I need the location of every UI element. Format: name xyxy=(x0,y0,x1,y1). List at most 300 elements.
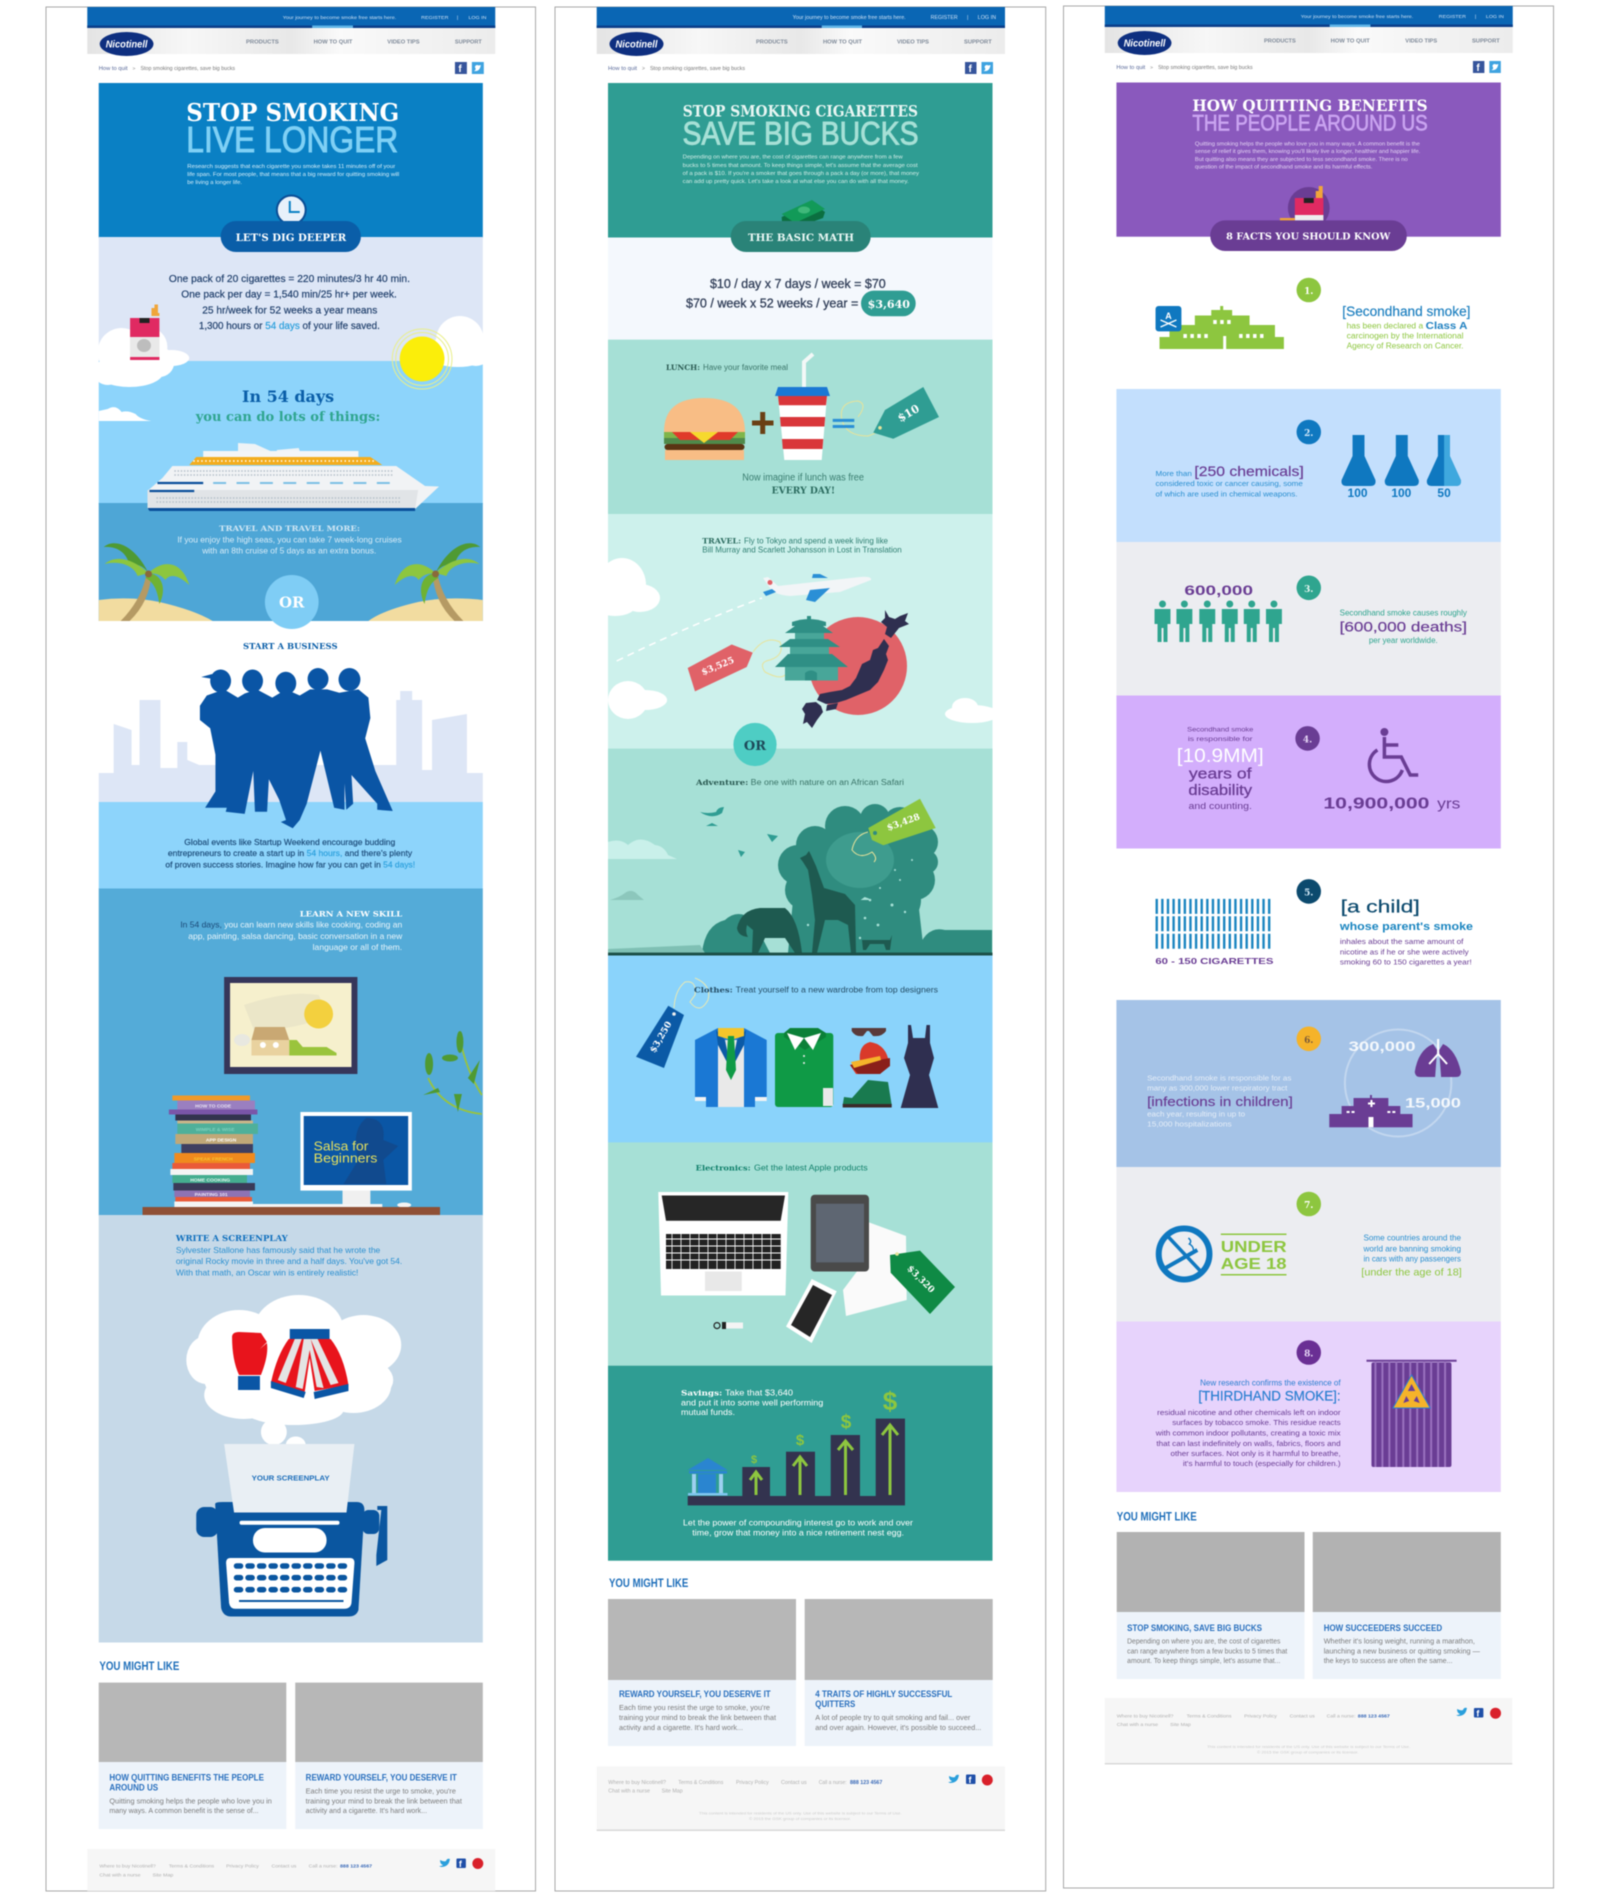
text: 10.9MM years xyxy=(1177,726,1264,811)
illustration: map of japan xyxy=(802,610,909,728)
footer: Contact us xyxy=(271,1864,297,1870)
price tag: $10: $10 xyxy=(895,402,922,425)
text: 600,000 deaths: [600,000 deaths] xyxy=(1340,618,1467,635)
price tag: $10 xyxy=(873,387,939,439)
text: pack arithmetic xyxy=(169,274,410,332)
section: write a screenplay: original Rocky movie in three and a half days. You've got 54. xyxy=(176,1257,402,1266)
chart: growing savings bars xyxy=(688,1386,905,1505)
card: stop smoking save big bucks: Depending on where you are, the cost of cigarettes xyxy=(1127,1636,1281,1645)
icon: clock xyxy=(277,196,306,224)
illustration: cruise ship xyxy=(147,443,439,511)
text: a child: whose parent's smoke xyxy=(1339,921,1473,933)
icon: plus xyxy=(752,412,774,434)
text: 10.9MM years: is responsible for xyxy=(1188,736,1253,743)
icon: cigarette pack on circle xyxy=(1280,186,1330,229)
heading: you might like: YOU MIGHT LIKE xyxy=(99,1661,180,1673)
price tag: $3,525: $3,525 xyxy=(700,656,736,678)
card: how quitting benefits: many ways. A common benefit is the sense of... xyxy=(109,1806,259,1815)
breadcrumb and share icons: How to quit xyxy=(1116,65,1146,71)
hero banner: LIVE LONGER xyxy=(186,119,398,160)
hero banner: SAVE BIG BUCKS xyxy=(682,116,918,152)
fact 3: 600,000 xyxy=(1184,582,1253,598)
icon: laptop xyxy=(658,1192,788,1296)
pale math section background xyxy=(99,237,483,362)
breadcrumb and share icons: f xyxy=(968,64,972,75)
flask labels: 100 xyxy=(1391,486,1412,500)
illustration: monitor with salsa video xyxy=(253,1112,412,1208)
site header: | xyxy=(1475,14,1476,20)
footer: Privacy Policy xyxy=(226,1864,259,1870)
pill: the basic math xyxy=(731,221,871,252)
text: 250 chemicals: considered toxic or cancer causing, some xyxy=(1156,479,1303,488)
card: reward yourself: REWARD YOURSELF, YOU DESERVE IT xyxy=(306,1773,457,1783)
site header: Your journey to become smoke free starts here. xyxy=(283,15,396,21)
card: reward yourself: training your mind to break the link between that xyxy=(619,1713,777,1722)
section: lunch: LUNCH: xyxy=(666,363,700,372)
section: learn a new skill: app, painting, salsa dancing, basic conversation in a new xyxy=(188,932,402,941)
fact 1: 1. xyxy=(1304,287,1313,297)
text: lunch free every day: Now imagine if lunch was free xyxy=(742,472,864,484)
text: 250 chemicals: of which are used in chemical weapons. xyxy=(1156,489,1298,499)
illustration: red sun xyxy=(809,617,907,715)
flask labels: 50 xyxy=(1437,486,1451,500)
icon: equals xyxy=(833,420,854,426)
card: reward yourself: Each time you resist the urge to smoke, you're xyxy=(619,1703,770,1712)
text: pack arithmetic: One pack per day = 1,540 min/25 hr+ per week. xyxy=(181,289,397,301)
fact 5: 5. xyxy=(1304,888,1313,898)
breadcrumb and share icons: > xyxy=(1150,65,1153,71)
card: reward yourself xyxy=(608,1599,796,1746)
footer: Where to buy Nicotinell? xyxy=(1117,1713,1174,1720)
text: thirdhand smoke: that can last indefinitely on walls, fabrics, floors and xyxy=(1156,1439,1341,1448)
text: 250 chemicals: [250 chemicals] xyxy=(1194,464,1304,479)
section: clothes: Clothes: xyxy=(694,986,733,994)
footer: Terms & Conditions xyxy=(1187,1713,1232,1720)
breadcrumb and share icons xyxy=(99,62,484,75)
text: travel and travel more: If you enjoy the high seas, you can take 7 week-long cruises xyxy=(177,535,402,545)
fact 3 xyxy=(1116,542,1501,696)
hero banner: can add up pretty quick. Let's take a look at what else you can do with all that money. xyxy=(683,179,909,185)
section: savings xyxy=(608,1366,992,1561)
card: stop smoking save big bucks: STOP SMOKING, SAVE BIG BUCKS xyxy=(1127,1623,1262,1633)
text: travel and travel more xyxy=(177,524,402,556)
fact 2 xyxy=(1116,389,1501,542)
text: 600,000 deaths: Secondhand smoke causes roughly xyxy=(1340,608,1467,618)
footer: 888 123 4567 xyxy=(1358,1713,1390,1720)
icon: soda cup xyxy=(775,354,830,460)
label: 300,000: 300,000 xyxy=(1349,1038,1416,1054)
footer: Chat with a nurse xyxy=(1117,1722,1158,1728)
site header: SUPPORT xyxy=(964,40,993,46)
breadcrumb and share icons: f xyxy=(458,64,462,75)
card: how succeeders succeed: HOW SUCCEEDERS SUCCEED xyxy=(1324,1623,1443,1633)
illustration: right palm xyxy=(395,543,480,621)
pill: 8 facts xyxy=(1210,220,1407,251)
section: learn a new skill: In 54 days, you can learn new skills like cooking, coding an xyxy=(180,920,402,930)
footer: Site Map xyxy=(662,1788,683,1794)
text: infections in children xyxy=(1147,1073,1293,1129)
text: secondhand smoke: [Secondhand smoke] xyxy=(1342,303,1470,319)
footer: f xyxy=(459,1859,462,1869)
breadcrumb and share icons: How to quit xyxy=(608,66,638,72)
section: electronics: Get the latest Apple products xyxy=(754,1164,868,1172)
heading: in 54 days: you can do lots of things: xyxy=(195,410,380,425)
text: 10.9MM years: years of xyxy=(1189,765,1253,783)
illustration: leaves xyxy=(423,1031,482,1114)
fact 8: 8. xyxy=(1304,1349,1313,1360)
site header: PRODUCTS xyxy=(756,40,788,46)
text: startup weekend: entrepreneurs to create a start up in 54 hours, and there's plenty xyxy=(168,849,413,858)
section: learn a new skill xyxy=(99,888,483,1216)
chart: growing savings bars: $ xyxy=(883,1386,898,1416)
site header: VIDEO TIPS xyxy=(387,39,420,46)
footer xyxy=(87,1849,495,1891)
illustration: stack of books: APP DESIGN xyxy=(206,1137,237,1144)
section: travel: TRAVEL: xyxy=(702,536,741,546)
hero banner: THE PEOPLE AROUND US xyxy=(1192,110,1428,136)
chart: growing savings bars: $ xyxy=(841,1412,852,1433)
hero banner: life span. For most people, that means that a big reward for quitting smoking will xyxy=(187,172,399,178)
text: travel and travel more: with an 8th cruise of 5 days as an extra bonus. xyxy=(201,546,376,556)
site header: REGISTER xyxy=(931,15,958,21)
site header: LOG IN xyxy=(1486,14,1504,20)
illustration: stack of books: HOW TO CODE xyxy=(195,1103,232,1110)
hero banner xyxy=(608,83,992,238)
footer: Terms & Conditions xyxy=(678,1780,724,1786)
hero banner: sense of relief it gives them, knowing you'll likely live a longer, healthier and happier life. xyxy=(1195,149,1421,155)
icon: cigarette pack xyxy=(130,304,159,360)
footer: Contact us xyxy=(781,1780,807,1786)
illustration: typewriter: YOUR SCREENPLAY xyxy=(252,1475,330,1483)
badge: or xyxy=(608,723,992,956)
section: lunch xyxy=(608,340,992,514)
icon: dress xyxy=(901,1025,938,1108)
text: banning smoking: in cars with any passengers xyxy=(1363,1254,1461,1264)
icon: wheelchair xyxy=(1369,728,1418,781)
pill: let's dig deeper: LET'S DIG DEEPER xyxy=(236,233,347,244)
text: adventure: Adventure: xyxy=(695,778,749,787)
text: 10,900,000 yrs: yrs xyxy=(1437,795,1460,813)
fact 1 xyxy=(1156,278,1470,351)
pill: 8 facts: 8 FACTS YOU SHOULD KNOW xyxy=(1226,231,1391,243)
hero banner: be living a longer life. xyxy=(187,180,242,186)
price tag: $3,250 xyxy=(636,1006,684,1068)
price tag: $3,320: $3,320 xyxy=(905,1264,936,1295)
site header: HOW TO QUIT xyxy=(823,40,863,46)
footer: © 2015 the GSK group of companies or its licensor. xyxy=(1257,1750,1359,1755)
footer: f xyxy=(968,1775,972,1785)
footer: Privacy Policy xyxy=(736,1780,769,1786)
illustration: stack of books xyxy=(169,1096,258,1207)
icon: green shirt xyxy=(775,1028,833,1107)
site header: PRODUCTS xyxy=(1264,38,1296,45)
site header: REGISTER xyxy=(1439,14,1466,20)
text: 250 chemicals: More than xyxy=(1156,469,1192,478)
site header: | xyxy=(457,15,458,21)
card: 4 traits: 4 TRAITS OF HIGHLY SUCCESSFUL xyxy=(815,1689,953,1699)
text: 600,000 deaths: per year worldwide. xyxy=(1369,636,1438,645)
icon: tablet xyxy=(811,1195,869,1272)
price tag string xyxy=(841,401,878,436)
breadcrumb and share icons: Stop smoking cigarettes, save big bucks xyxy=(1158,65,1253,71)
card: how succeeders succeed: launching a new business or quitting smoking — xyxy=(1324,1646,1480,1655)
price tag: $3,525 xyxy=(688,640,785,691)
footer: Call a nurse: xyxy=(309,1864,338,1870)
hero banner: question of the impact of secondhand smoke and its harmful effects. xyxy=(1195,164,1373,171)
illustration: monitor with salsa video: Beginners xyxy=(314,1150,378,1166)
text: 10.9MM years: [10.9MM] xyxy=(1177,746,1264,767)
breadcrumb and share icons: f xyxy=(1476,63,1480,74)
section: clothes xyxy=(608,956,992,1142)
text: startup weekend: Global events like Startup Weekend encourage budding xyxy=(184,838,396,847)
breadcrumb and share icons: > xyxy=(133,66,136,72)
fact 4: 4. xyxy=(1303,735,1312,745)
footer: Call a nurse: xyxy=(1327,1713,1356,1720)
footer: Where to buy Nicotinell? xyxy=(99,1864,156,1870)
text: infections in children: each year, resulting in up to xyxy=(1147,1109,1245,1119)
footer xyxy=(597,1766,1005,1831)
icon: burger xyxy=(664,398,745,460)
site header: LOG IN xyxy=(978,15,996,21)
site header: PRODUCTS xyxy=(246,39,279,46)
text: thirdhand smoke: [THIRDHAND SMOKE]: xyxy=(1198,1387,1341,1404)
site header xyxy=(87,7,495,56)
heading: start a business: START A BUSINESS xyxy=(243,642,338,651)
text: 10.9MM years: disability xyxy=(1188,782,1253,799)
fact 2: 2. xyxy=(1304,429,1313,439)
section: savings: mutual funds. xyxy=(681,1408,735,1417)
section: learn a new skill: LEARN A NEW SKILL xyxy=(300,909,403,919)
flight path xyxy=(617,598,762,661)
text: 600,000 deaths xyxy=(1340,608,1467,645)
card: how succeeders succeed: Whether it's losing weight, running a marathon, xyxy=(1324,1636,1475,1645)
section: clothes: Treat yourself to a new wardrobe from top designers xyxy=(736,986,938,994)
footer: 888 123 4567 xyxy=(850,1780,883,1786)
fact 3: 3. xyxy=(1304,585,1313,595)
site header: LOG IN xyxy=(468,15,487,21)
footer: This content is intended for residents of the US only. Use of this website is subject to our Terms of Use. xyxy=(699,1812,902,1816)
price tag: $3,320 xyxy=(890,1251,955,1314)
chart: growing savings bars: $ xyxy=(796,1432,805,1449)
breadcrumb and share icons: How to quit xyxy=(99,66,128,72)
badge: $3,640: $3,640 xyxy=(868,298,910,311)
text: thirdhand smoke: other surfaces. Not only is it harmful to breathe, xyxy=(1170,1449,1341,1458)
text: infections in children: 15,000 hospitalizations xyxy=(1147,1119,1232,1129)
footer: Terms & Conditions xyxy=(169,1864,215,1870)
footer: f xyxy=(1476,1708,1479,1719)
price tag: $3,250: $3,250 xyxy=(649,1020,675,1055)
footer: Call a nurse: xyxy=(819,1780,847,1786)
breadcrumb and share icons: > xyxy=(642,66,645,72)
breadcrumb and share icons xyxy=(1116,61,1501,74)
flask labels: 100 xyxy=(1348,486,1368,500)
footer: This content is intended for residents of the US only. Use of this website is subject to our Terms of Use. xyxy=(1207,1745,1410,1749)
site header: Nicotinell xyxy=(106,39,148,51)
section: savings: and put it into some well performing xyxy=(681,1398,823,1408)
label: under age 18 xyxy=(1221,1234,1287,1276)
icon: receipts xyxy=(843,1222,907,1316)
illustration: stack of books: WIMPLE & WISE xyxy=(196,1127,235,1133)
hero banner xyxy=(1116,82,1501,237)
sky blue band xyxy=(99,802,483,889)
hero banner: HOW QUITTING BENEFITS xyxy=(1192,96,1428,115)
card: stop smoking save big bucks: can range anywhere from a few bucks to 5 times that xyxy=(1127,1646,1288,1655)
icon: cash stack xyxy=(782,200,825,228)
site header: REGISTER xyxy=(421,15,449,21)
text: a child: [a child] xyxy=(1341,896,1420,917)
badge: or: OR xyxy=(744,739,766,754)
icon: bank xyxy=(688,1458,728,1496)
fact 4 xyxy=(1116,696,1501,848)
icon: curtain with hazard sign xyxy=(1366,1361,1457,1467)
card: how quitting benefits: HOW QUITTING BENEFITS THE PEOPLE xyxy=(109,1773,264,1783)
icon: phone xyxy=(786,1279,837,1343)
breadcrumb and share icons: Stop smoking cigarettes, save big bucks xyxy=(141,66,235,72)
breadcrumb and share icons xyxy=(608,62,993,75)
section: savings: Savings: xyxy=(681,1388,723,1398)
site header xyxy=(1105,6,1513,55)
breadcrumb and share icons: Stop smoking cigarettes, save big bucks xyxy=(650,66,745,72)
text: compounding interest: Let the power of compounding interest go to work and over xyxy=(683,1518,913,1528)
card: reward yourself: Each time you resist the urge to smoke, you're xyxy=(306,1786,456,1796)
fact 5 xyxy=(1155,879,1473,967)
card: stop smoking save big bucks: amount. To keep things simple, let's assume that... xyxy=(1127,1656,1280,1665)
section: write a screenplay: With that math, an Oscar win is entirely realistic! xyxy=(176,1268,358,1278)
text: secondhand smoke xyxy=(1342,303,1470,351)
badge: or xyxy=(265,575,319,629)
card: reward yourself: REWARD YOURSELF, YOU DESERVE IT xyxy=(619,1689,771,1699)
hero banner: But quitting also means they are subjected to less secondhand smoke. There is no xyxy=(1195,157,1408,163)
text: secondhand smoke: Class A xyxy=(1426,321,1468,332)
icon: usb stick xyxy=(714,1322,743,1329)
text: thirdhand smoke: surfaces by tobacco smoke. This residue reacts xyxy=(1172,1418,1341,1427)
footer: Site Map xyxy=(152,1872,174,1879)
text: travel and travel more: TRAVEL AND TRAVEL MORE: xyxy=(219,524,360,533)
footer: Contact us xyxy=(1290,1713,1315,1720)
icon: boxing shorts xyxy=(271,1329,348,1399)
card: reward yourself xyxy=(295,1683,483,1829)
card: 4 traits: and over again. However, it's possible to succeed... xyxy=(815,1723,981,1732)
site header: SUPPORT xyxy=(455,39,483,46)
icon: airplane xyxy=(763,574,871,602)
icon: suit jacket xyxy=(695,1028,767,1107)
footer: Chat with a nurse xyxy=(608,1788,650,1794)
hero banner: STOP SMOKING CIGARETTES xyxy=(683,102,918,120)
text: secondhand smoke: carcinogen by the International xyxy=(1347,331,1464,341)
card: reward yourself: training your mind to break the link between that xyxy=(306,1796,463,1805)
icon: boxing glove xyxy=(232,1332,267,1390)
section: electronics: Electronics: xyxy=(696,1164,751,1172)
text: thirdhand smoke: New research confirms the existence of xyxy=(1200,1378,1341,1388)
illustration: desk xyxy=(143,1207,440,1216)
icon: factory building xyxy=(1160,306,1284,349)
section: travel xyxy=(593,514,999,749)
footer: 888 123 4567 xyxy=(340,1864,372,1870)
illustration: left palm xyxy=(104,543,189,621)
site header: HOW TO QUIT xyxy=(314,39,353,46)
text: infections in children: many as 300,000 lower respiratory tract xyxy=(1147,1083,1288,1093)
site header: SUPPORT xyxy=(1472,38,1501,45)
illustration: stack of books: HOME COOKING xyxy=(190,1177,230,1184)
text: thirdhand smoke: it's harmful to touch (especially for children.) xyxy=(1183,1459,1341,1468)
icon: pagoda xyxy=(775,616,848,680)
heading: in 54 days: In 54 days xyxy=(242,387,334,406)
footer: © 2015 the GSK group of companies or its licensor. xyxy=(749,1817,851,1821)
illustration: safari scene xyxy=(608,804,992,956)
hero banner: STOP SMOKING xyxy=(186,99,399,127)
text: banning smoking xyxy=(1361,1233,1462,1279)
sand dunes xyxy=(99,598,483,621)
text: compounding interest: time, grow that money into a nice retirement nest egg. xyxy=(692,1528,904,1538)
section: travel: Fly to Tokyo and spend a week living like xyxy=(744,536,889,546)
card: 4 traits: QUITTERS xyxy=(815,1699,855,1709)
text: banning smoking: world are banning smoking xyxy=(1362,1244,1461,1254)
ring xyxy=(1345,1030,1451,1136)
hero banner: Research suggests that each cigarette you smoke takes 11 minutes off of your xyxy=(187,164,395,170)
text: a child: inhales about the same amount of xyxy=(1340,937,1464,946)
footer: Chat with a nurse xyxy=(99,1872,141,1879)
icon: row of people xyxy=(1155,600,1282,642)
fact 6 xyxy=(1116,1000,1501,1167)
section: savings: Take that $3,640 xyxy=(725,1388,794,1398)
sky section xyxy=(94,316,492,504)
card: 4 traits xyxy=(805,1599,993,1746)
icon: hazard label xyxy=(1156,306,1181,331)
text: adventure xyxy=(695,778,904,787)
panel: stop smoking live longer page xyxy=(46,7,536,1891)
fact 7: 7. xyxy=(1304,1201,1313,1211)
price tag: $3,428: $3,428 xyxy=(886,812,922,834)
text: 10,900,000 yrs: 10,900,000 xyxy=(1323,795,1430,813)
text: startup weekend xyxy=(165,838,415,870)
text: secondhand smoke: Agency of Research on Cancer. xyxy=(1347,341,1463,351)
section: learn a new skill: language or all of them. xyxy=(313,943,402,952)
label: under age 18: AGE 18 xyxy=(1221,1256,1287,1273)
badge: or: OR xyxy=(279,593,305,612)
illustration: stack of books: PAINTING 101 xyxy=(195,1192,228,1198)
text: banning smoking: [under the age of 18] xyxy=(1361,1267,1462,1279)
illustration: monitor with salsa video: Salsa for xyxy=(314,1138,369,1154)
card: how quitting benefits: AROUND US xyxy=(109,1783,158,1793)
icon: hazard label: A xyxy=(1165,311,1172,321)
text: lunch free every day xyxy=(742,472,864,496)
text: 10,900,000 yrs xyxy=(1323,795,1460,813)
card: reward yourself: activity and a cigarette. It's hard work... xyxy=(306,1806,427,1815)
heading: you might like: YOU MIGHT LIKE xyxy=(1117,1511,1197,1524)
text: compounding interest xyxy=(683,1518,913,1538)
label: under age 18: UNDER xyxy=(1221,1239,1287,1256)
text: pack arithmetic: One pack of 20 cigarettes = 220 minutes/3 hr 40 min. xyxy=(169,274,410,285)
card: how succeeders succeed: the keys to success are often the same... xyxy=(1324,1656,1453,1665)
illustration: stack of books: SPEAK FRENCH xyxy=(194,1156,233,1163)
icon: sun xyxy=(392,329,452,389)
text: pack arithmetic: 1,300 hours or 54 days of your life saved. xyxy=(199,321,380,332)
hero banner: of a pack is $10. If you're a smoker that goes through a pack a day (or more), that money xyxy=(683,171,919,177)
panel: people around us page xyxy=(1064,6,1554,1888)
section: write a screenplay: WRITE A SCREENPLAY xyxy=(175,1234,288,1243)
section: travel: Bill Murray and Scarlett Johansson in Lost in Translation xyxy=(702,546,902,555)
text: savings math: $70 / week x 52 weeks / year = xyxy=(686,296,858,310)
section: write a screenplay xyxy=(99,1215,483,1642)
card: 4 traits: A lot of people try to quit smoking and fail... over xyxy=(815,1713,971,1722)
footer: Where to buy Nicotinell? xyxy=(608,1780,666,1786)
text: infections in children: Secondhand smoke is responsible for as xyxy=(1147,1073,1292,1083)
hero banner: Depending on where you are, the cost of cigarettes can range anywhere from a few xyxy=(683,155,903,161)
card: reward yourself: activity and a cigarette. It's hard work... xyxy=(619,1723,743,1732)
text: banning smoking: Some countries around the xyxy=(1363,1233,1461,1243)
text: startup weekend: of proven success stories. Imagine how far you can get in 54 days! xyxy=(165,860,415,870)
text: lunch free every day: EVERY DAY! xyxy=(772,486,835,496)
